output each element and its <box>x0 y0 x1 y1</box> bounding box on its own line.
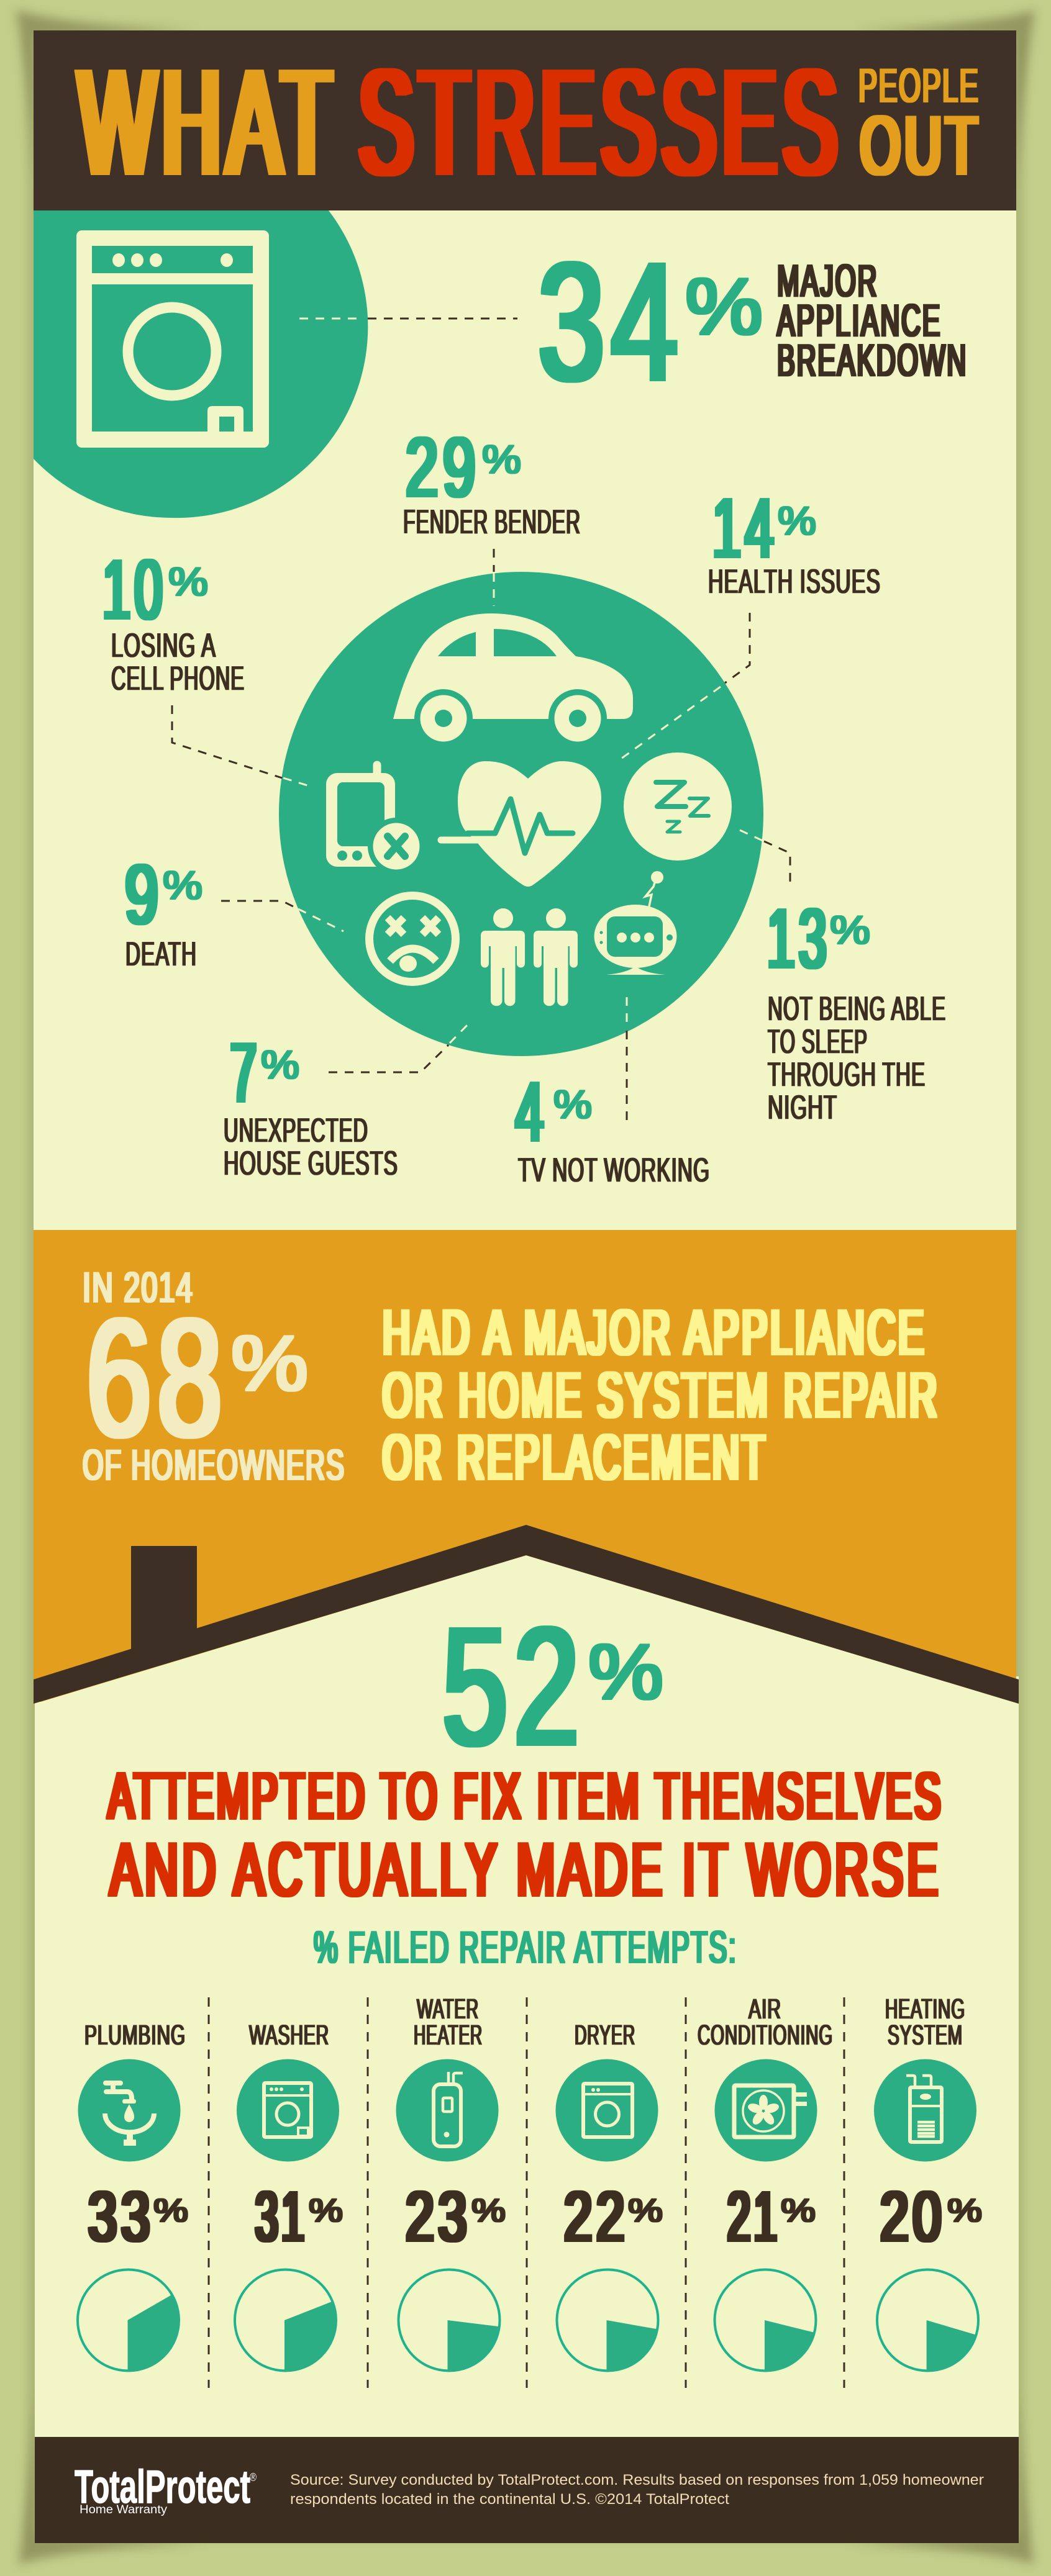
callout: unexpected house guests: UNEXPECTED <box>224 1111 368 1149</box>
callout: death: % <box>163 862 202 908</box>
callout: unexpected house guests: % <box>261 1042 299 1087</box>
column: air conditioning <box>698 1993 833 2372</box>
callout: losing a cell phone: LOSING A <box>111 626 216 664</box>
panel: appliance breakdown <box>34 210 968 518</box>
callout: losing a cell phone <box>102 543 307 785</box>
icon: house roof and chimney <box>34 1525 1019 1714</box>
callout: health issues <box>617 481 881 762</box>
callout: fender bender: 29 <box>406 420 480 514</box>
column: washer <box>235 2019 343 2372</box>
column: air conditioning: 21 <box>727 2177 780 2256</box>
pie: 31 percent <box>235 2270 336 2372</box>
stat: percent sign: % <box>588 1628 663 1715</box>
title word: OUT: OUT <box>860 100 981 192</box>
icon: heating unit <box>874 2059 976 2162</box>
column: dryer: % <box>628 2192 663 2229</box>
pie: 22 percent <box>557 2270 658 2372</box>
text: appliance repair statement: OR REPLACEMENT <box>383 1422 768 1493</box>
stat: 34 percent: 34 <box>538 228 684 415</box>
column: air conditioning: CONDITIONING <box>698 2019 833 2051</box>
icon: dead face <box>369 895 456 982</box>
column: plumbing: PLUMBING <box>84 2019 186 2051</box>
callout: health issues: 14 <box>712 481 778 575</box>
callout: unexpected house guests: HOUSE GUESTS <box>224 1144 398 1182</box>
stat: percent sign: % <box>685 262 763 351</box>
logo: TotalProtect: TotalProtect <box>75 2461 250 2513</box>
pie: 20 percent <box>877 2270 978 2372</box>
callout: losing a cell phone: 10 <box>102 543 166 636</box>
large green circle <box>279 572 763 1056</box>
source note: respondents located in the continental U.S. ©2014 TotalProtect <box>290 2491 729 2508</box>
logo: TotalProtect: ® <box>250 2471 257 2483</box>
source note <box>290 2472 984 2508</box>
heading: failed repair attempts: % FAILED REPAIR ATTEMPTS: <box>314 1923 737 1973</box>
column: water heater: % <box>471 2192 506 2229</box>
column: plumbing <box>78 2019 188 2372</box>
icon: broken tv <box>594 871 677 975</box>
panel: title band <box>34 30 1016 210</box>
column: washer: WASHER <box>249 2019 329 2051</box>
icon: dryer <box>555 2059 658 2162</box>
column: water heater <box>396 1993 506 2372</box>
column: heating system: % <box>947 2192 982 2229</box>
text: in 2014: IN 2014 <box>83 1263 194 1311</box>
callout: health issues: HEALTH ISSUES <box>708 562 881 600</box>
callout: not sleeping: THROUGH THE <box>768 1055 926 1093</box>
stat: 52 percent: 52 <box>442 1593 585 1780</box>
callout: death: DEATH <box>125 934 197 973</box>
logo: TotalProtect <box>75 2461 257 2516</box>
column: water heater: HEATER <box>414 2019 483 2051</box>
text: of homeowners: OF HOMEOWNERS <box>83 1441 345 1489</box>
icon: sleep bubble <box>624 752 732 861</box>
icon: two house guests <box>481 908 578 1006</box>
callout: health issues: % <box>778 498 816 543</box>
pie: 23 percent <box>399 2270 499 2372</box>
pie: 21 percent <box>714 2270 816 2372</box>
callout: tv not working <box>516 997 710 1189</box>
column: plumbing: 33 <box>88 2177 154 2256</box>
icon: washer <box>237 2059 339 2162</box>
icon: washer on large circle <box>34 210 368 518</box>
column: washer: % <box>309 2192 343 2229</box>
pie: 33 percent <box>78 2270 179 2372</box>
column: heating system: HEATING <box>885 1993 965 2025</box>
callout: not sleeping: NIGHT <box>768 1088 837 1126</box>
panel: stressors circle <box>102 420 946 1189</box>
icon: heart with pulse <box>441 761 601 887</box>
callout: death: 9 <box>125 847 158 941</box>
source note: Source: Survey conducted by TotalProtect.com. Results based on responses from 1,059 homeowner <box>290 2472 984 2488</box>
callout: fender bender: FENDER BENDER <box>403 502 581 541</box>
title word: WHAT: WHAT <box>79 37 338 207</box>
column: water heater: 23 <box>406 2177 471 2256</box>
column: air conditioning: AIR <box>748 1993 781 2025</box>
callout: tv not working: TV NOT WORKING <box>518 1150 710 1189</box>
icon: lost phone <box>326 765 425 875</box>
label: major appliance breakdown: APPLIANCE <box>777 296 942 346</box>
panel: orange homeowners band <box>34 1230 1016 1702</box>
icon: air conditioner fan <box>714 2059 817 2162</box>
logo: TotalProtect: Home Warranty <box>80 2503 168 2516</box>
callout: fender bender: % <box>482 436 521 482</box>
callout: not sleeping: 13 <box>767 892 830 985</box>
icon: tap and drain <box>78 2059 180 2162</box>
callout: not sleeping: % <box>830 907 870 952</box>
stat: 68 percent: 68 <box>86 1285 228 1471</box>
callout: losing a cell phone: % <box>168 559 208 604</box>
icon: water heater <box>396 2059 498 2162</box>
label: major appliance breakdown <box>777 256 968 386</box>
stat: percent sign: % <box>231 1319 308 1407</box>
icon: car <box>393 613 633 748</box>
panel: failed repair columns <box>78 1993 982 2388</box>
column: water heater: WATER <box>417 1993 479 2025</box>
column: plumbing: % <box>153 2192 188 2229</box>
callout: tv not working: 4 <box>516 1065 544 1159</box>
callout: not sleeping: TO SLEEP <box>768 1022 868 1060</box>
column: dryer <box>555 2019 663 2372</box>
column: air conditioning: % <box>781 2192 816 2229</box>
callout: not sleeping <box>740 830 946 1126</box>
panel: footer <box>35 2437 1019 2543</box>
column: heating system <box>874 1993 982 2372</box>
connector line <box>299 318 517 319</box>
column: washer: 31 <box>255 2177 307 2256</box>
callout: unexpected house guests <box>224 1020 472 1182</box>
callout: fender bender <box>403 420 581 606</box>
callout: unexpected house guests: 7 <box>230 1026 257 1119</box>
column: heating system: SYSTEM <box>888 2019 963 2051</box>
column: dryer: DRYER <box>575 2019 635 2051</box>
text: appliance repair statement <box>383 1297 940 1493</box>
column: dryer: 22 <box>564 2177 629 2256</box>
callout: losing a cell phone: CELL PHONE <box>111 659 245 697</box>
panel: diy repair result <box>108 1593 944 1973</box>
column: heating system: 20 <box>880 2177 945 2256</box>
label: major appliance breakdown: MAJOR <box>777 256 878 306</box>
callout: tv not working: % <box>553 1082 592 1127</box>
callout: death <box>125 847 344 973</box>
